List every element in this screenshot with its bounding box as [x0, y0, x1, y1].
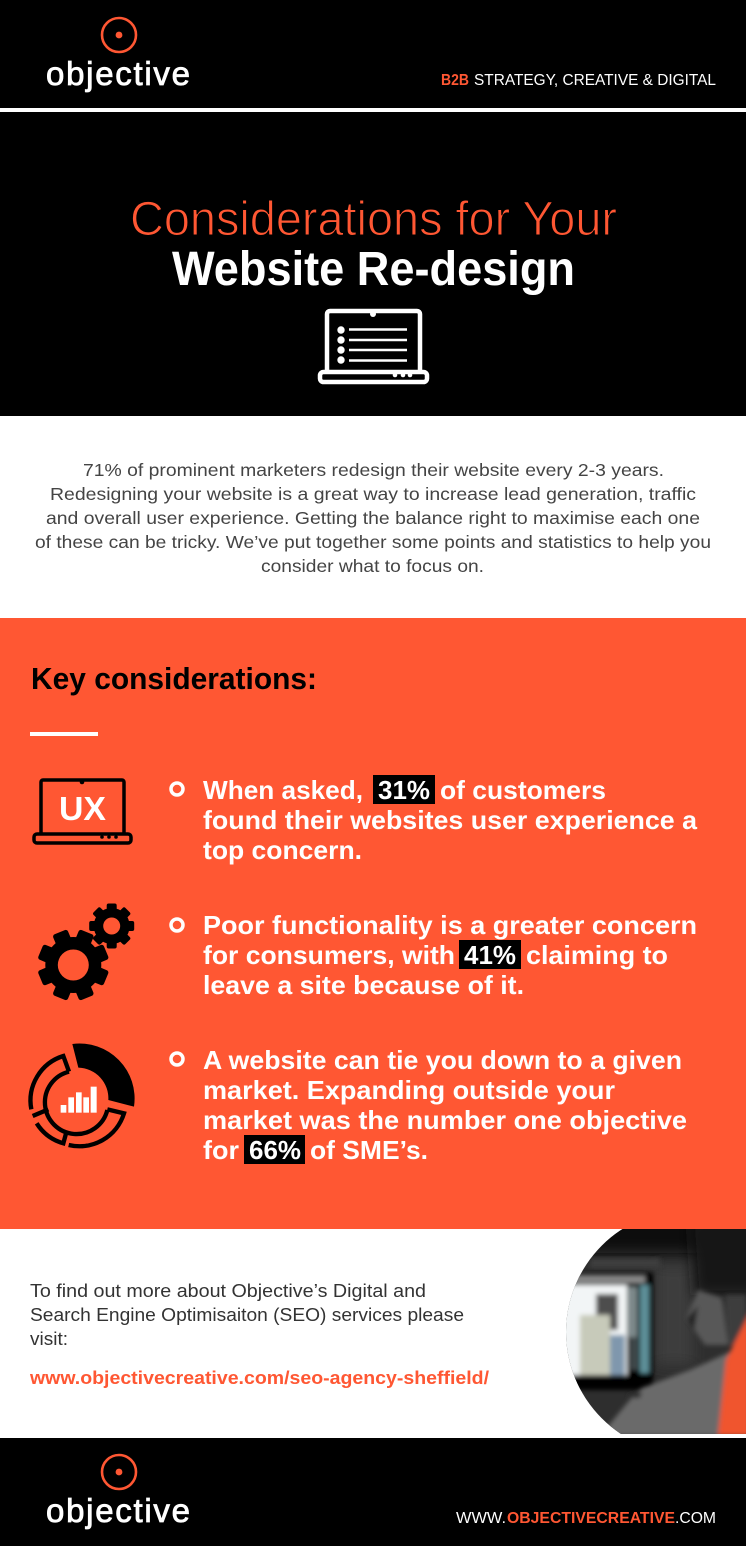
bullet 1 [171, 775, 698, 865]
bullet 3 [171, 1045, 687, 1165]
footer call to action text: To find out more about Objective’s Digital and [30, 1281, 426, 1301]
footer call to action text [29, 1281, 489, 1388]
footer logo [46, 1455, 190, 1529]
footer band [0, 1438, 746, 1546]
title: Considerations for Your [130, 193, 617, 246]
bullet 1: 31% [378, 775, 430, 805]
icon: gears [37, 904, 134, 1001]
title: Website Re-design [172, 243, 575, 296]
bullet 1: top concern. [203, 835, 362, 865]
bullet 3: A website can tie you down to a given [203, 1045, 682, 1075]
bullet 2 [171, 910, 697, 1000]
bullet 3: of SME’s. [310, 1135, 428, 1165]
heading: Key considerations: [31, 661, 317, 696]
icon: laptop with list [320, 311, 427, 382]
tagline: STRATEGY, CREATIVE & DIGITAL [474, 72, 716, 89]
link: www.objectivecreative.com/seo-agency-sheffield/ [29, 1368, 489, 1388]
bullet 2: 41% [464, 940, 516, 970]
icon: UX laptop [34, 780, 131, 843]
footer web address [456, 1510, 716, 1527]
bullet 2: Poor functionality is a greater concern [203, 910, 697, 940]
bullet 2: claiming to [526, 940, 668, 970]
panel: key considerations [0, 618, 746, 1229]
large gear [37, 929, 109, 1001]
intro text: and overall user experience. Getting the balance right to maximise each one [46, 508, 700, 528]
intro text: consider what to focus on. [261, 556, 484, 576]
bullet 3: for [203, 1135, 239, 1165]
intro text: 71% of prominent marketers redesign their website every 2-3 years. [83, 460, 664, 480]
header band [0, 0, 746, 108]
bullet 3: market. Expanding outside your [203, 1075, 615, 1105]
bullet 3: 66% [249, 1135, 301, 1165]
footer logo: objective [46, 1492, 190, 1529]
head [690, 1222, 746, 1295]
icon: donut chart with bars [31, 1044, 135, 1146]
footer call to action text: Search Engine Optimisaiton (SEO) services please [30, 1305, 464, 1325]
bullet 2: for consumers, with [203, 940, 455, 970]
hero band [0, 112, 746, 416]
bullet 1: When asked, [203, 775, 363, 805]
tagline: B2B [441, 72, 469, 89]
small gear [89, 904, 134, 948]
logo [46, 18, 190, 92]
footer web address: WWW. [456, 1510, 506, 1527]
intro text: Redesigning your website is a great way to increase lead generation, traffic [50, 484, 696, 504]
footer call to action text: visit: [30, 1329, 68, 1349]
title [130, 193, 617, 296]
intro text: of these can be tricky. We’ve put together some points and statistics to help you [35, 532, 711, 552]
bullet 1: found their websites user experience a [203, 805, 698, 835]
icon: UX laptop: UX [59, 790, 106, 827]
bullet 3: market was the number one objective [203, 1105, 687, 1135]
footer web address: .COM [675, 1510, 716, 1527]
intro text [35, 460, 711, 576]
footer web address: OBJECTIVECREATIVE [507, 1510, 675, 1527]
photo: person at monitor [566, 1229, 746, 1434]
bullet 2: leave a site because of it. [203, 970, 524, 1000]
bullet 1: of customers [440, 775, 606, 805]
logo: objective [46, 55, 190, 92]
